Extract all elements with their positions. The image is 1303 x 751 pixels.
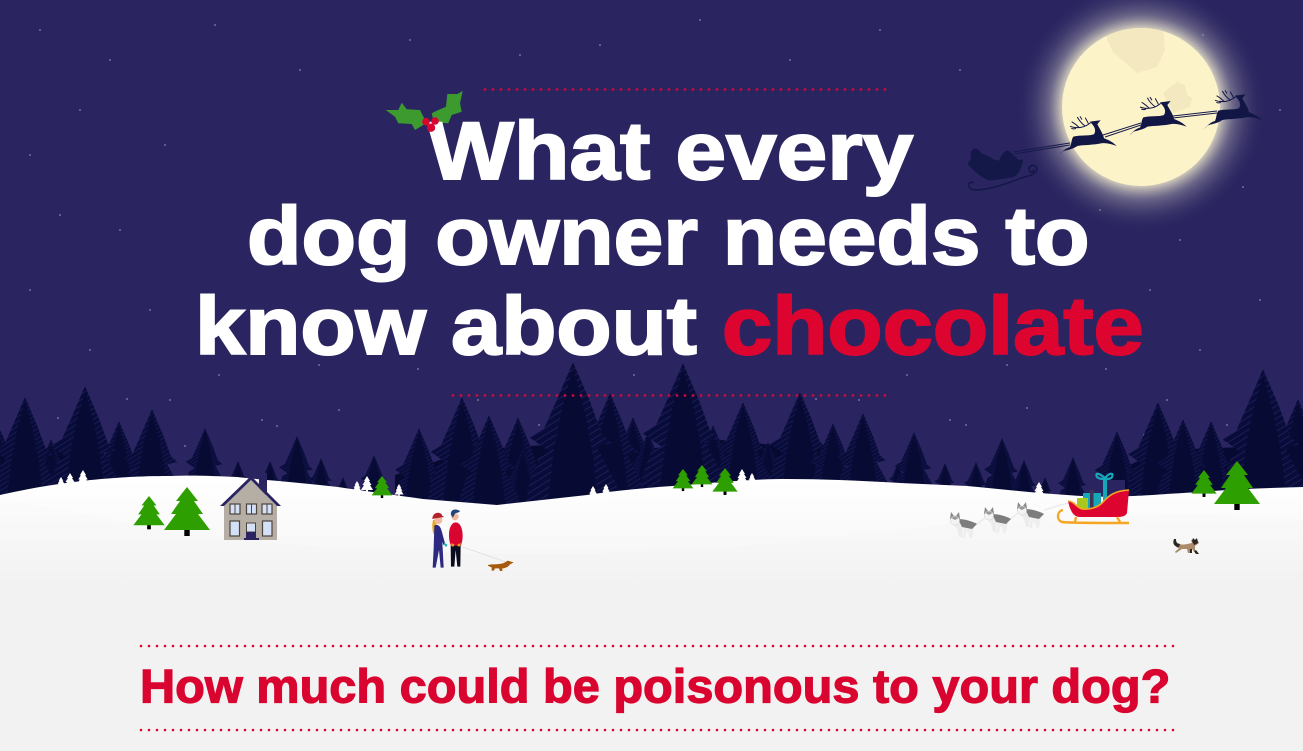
leash <box>462 547 505 562</box>
dog <box>488 561 514 571</box>
sleigh silhouette <box>967 149 1037 190</box>
dark pine forest <box>0 362 1303 515</box>
holly berries <box>422 117 439 132</box>
cat <box>1173 538 1199 554</box>
couple walking dog <box>432 509 514 571</box>
red sleigh with presents <box>1058 474 1129 523</box>
husky team <box>950 502 1068 538</box>
husky 3 <box>1017 502 1044 528</box>
man <box>449 509 463 567</box>
dotted rule below subheading <box>141 729 1174 731</box>
moon <box>1028 0 1254 220</box>
title line 1: What every <box>428 106 913 197</box>
husky 2 <box>984 507 1011 533</box>
main title <box>195 106 1144 372</box>
dotted rule below title <box>453 394 886 397</box>
harness lines <box>1013 111 1217 154</box>
house <box>220 473 281 540</box>
reindeer middle <box>1129 97 1187 136</box>
dotted rule above title <box>485 88 886 91</box>
holly decoration <box>386 91 463 130</box>
reindeer rear <box>1059 116 1117 155</box>
subheading: How much could be poisonous to your dog? <box>140 661 1170 713</box>
husky 1 <box>950 512 977 538</box>
white mini trees <box>56 469 1045 500</box>
reindeer front <box>1204 90 1262 129</box>
snowy hills <box>0 476 1303 751</box>
holly leaf left <box>386 103 425 130</box>
woman <box>432 513 448 568</box>
harness line <box>977 503 1068 524</box>
green trees <box>133 461 1260 536</box>
title line 2: dog owner needs to <box>247 190 1090 282</box>
stars <box>29 19 1281 447</box>
title line 3: know about chocolate <box>195 281 1144 372</box>
flying reindeer and sleigh silhouette <box>967 90 1262 190</box>
dotted rule above subheading <box>141 645 1174 647</box>
holly leaf right <box>432 91 463 123</box>
